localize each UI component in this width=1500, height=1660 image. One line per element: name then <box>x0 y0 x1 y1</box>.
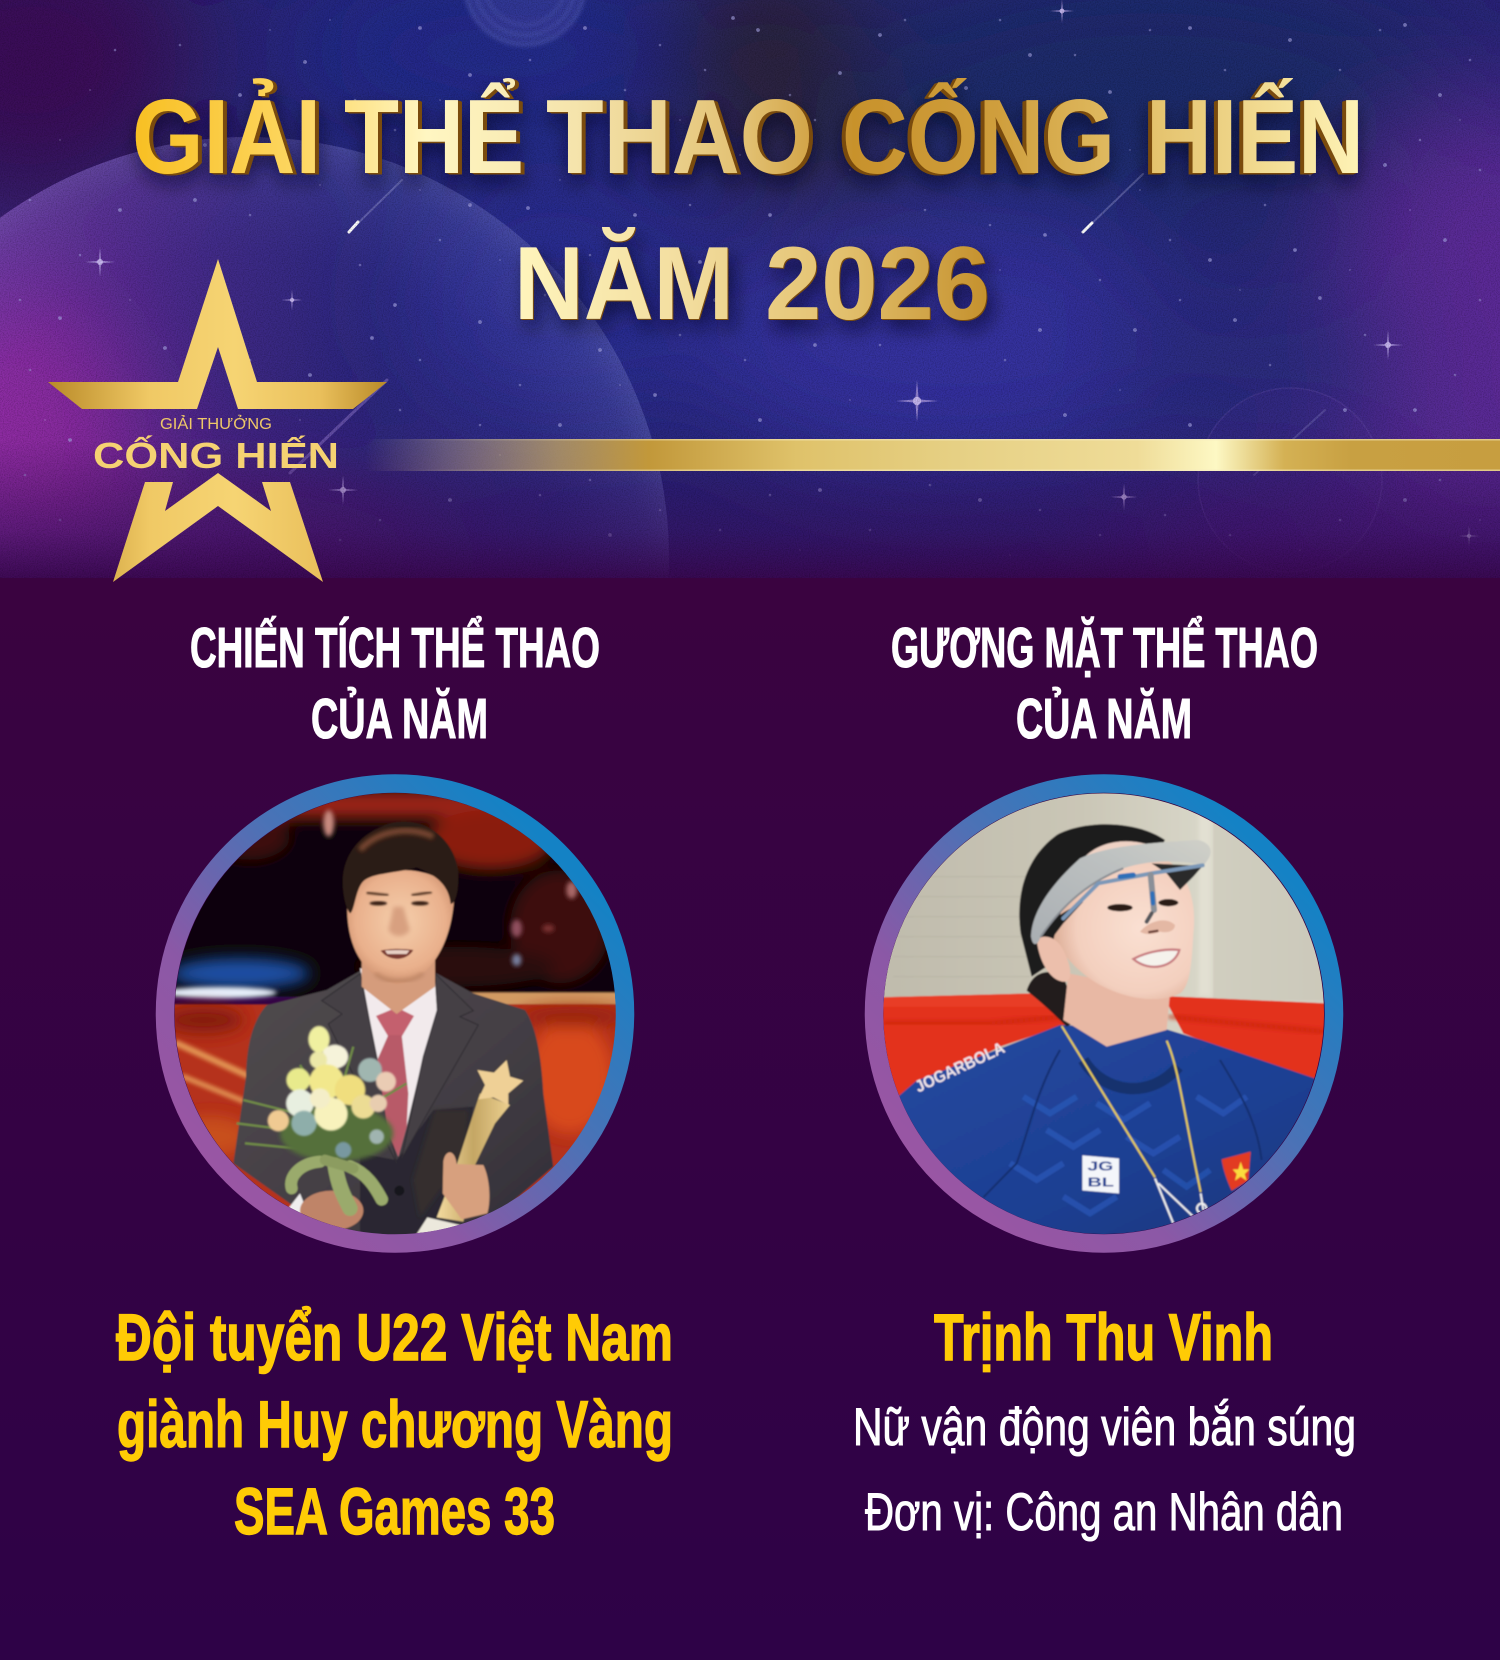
shooting glasses frame <box>1063 865 1203 922</box>
suit <box>233 970 553 1240</box>
wall background <box>884 793 1324 1055</box>
left award text: SEA Games 33 <box>234 1474 555 1548</box>
Vietnam flag patch <box>1222 1152 1251 1191</box>
tie <box>376 1007 414 1157</box>
left column heading: CỦA NĂM <box>311 686 488 751</box>
shirt chevron texture <box>1010 1097 1247 1213</box>
title <box>132 77 1364 196</box>
logo text large: CỐNG HIẾN <box>93 434 339 476</box>
shirt <box>360 968 437 1157</box>
right award details: Đơn vị: Công an Nhân dân <box>865 1483 1343 1542</box>
sparkle stars <box>85 0 1480 546</box>
left hand <box>288 1191 363 1231</box>
subtitle year <box>514 226 990 342</box>
red flag behind <box>880 993 1327 1097</box>
planet: right faint <box>1198 388 1382 528</box>
blue shirt <box>883 1025 1327 1240</box>
right column heading <box>891 615 1318 751</box>
left award text: Đội tuyển U22 Việt Nam <box>116 1300 673 1374</box>
suit lower shadow <box>360 1107 473 1237</box>
bouquet <box>237 1026 407 1162</box>
sleeve text: JOGARBOLA <box>912 1038 1008 1096</box>
gold ribbon bar <box>365 439 1500 471</box>
subtitle year: NĂM <box>514 226 734 342</box>
left column heading: CHIẾN TÍCH THỂ THAO <box>190 615 600 680</box>
star field <box>20 18 1480 560</box>
stage background <box>174 793 616 1208</box>
title: GIẢI <box>132 77 321 196</box>
title: THAO <box>546 78 813 196</box>
photo: coach with bouquet and trophy <box>163 790 627 1240</box>
logo text small: GIẢI THƯỞNG <box>160 415 272 433</box>
photo: athlete with visor and flag <box>880 790 1330 1240</box>
title: HIẾN <box>1146 78 1364 196</box>
neck <box>1063 973 1170 1047</box>
ribbon <box>291 1160 382 1208</box>
eyes and brows <box>1107 899 1178 911</box>
star upper part <box>48 259 387 409</box>
right column heading: CỦA NĂM <box>1016 686 1192 751</box>
star lower part <box>113 473 323 582</box>
header panel: galaxy background <box>0 0 1500 578</box>
left column heading <box>190 615 600 751</box>
lapels <box>322 973 478 1163</box>
award logo: gold star <box>48 259 387 582</box>
ear <box>1037 937 1070 982</box>
visor <box>1031 840 1211 944</box>
sleeve seam and collar <box>983 1050 1262 1197</box>
right award name: Trịnh Thu Vinh <box>934 1300 1273 1374</box>
photo ring left <box>165 784 625 1244</box>
lanyard <box>1062 1026 1206 1223</box>
shooting stars <box>290 174 1325 475</box>
hair back and ponytail <box>1019 824 1165 1027</box>
right award details: Nữ vận động viên bắn súng <box>853 1398 1356 1457</box>
brand logo on shirt <box>1082 1155 1119 1194</box>
title: CỐNG <box>842 78 1115 196</box>
face <box>1053 857 1194 999</box>
photo ring right <box>874 784 1334 1244</box>
planet: top small <box>465 0 585 45</box>
smile <box>1133 950 1179 967</box>
head <box>343 822 458 1014</box>
right hand <box>443 1152 489 1219</box>
title: THỂ <box>344 78 524 196</box>
right award details <box>853 1398 1356 1542</box>
hair near temple <box>1040 902 1083 937</box>
left award text <box>116 1300 673 1548</box>
trophy <box>417 1060 523 1234</box>
forehead <box>1083 841 1152 875</box>
left award text: giành Huy chương Vàng <box>117 1387 673 1461</box>
nose <box>1140 920 1175 934</box>
subtitle year: 2026 <box>765 226 990 342</box>
planet: large left <box>0 137 669 560</box>
brand logo on shirt: JG <box>1087 1159 1113 1174</box>
brand logo on shirt: BL <box>1087 1175 1114 1190</box>
